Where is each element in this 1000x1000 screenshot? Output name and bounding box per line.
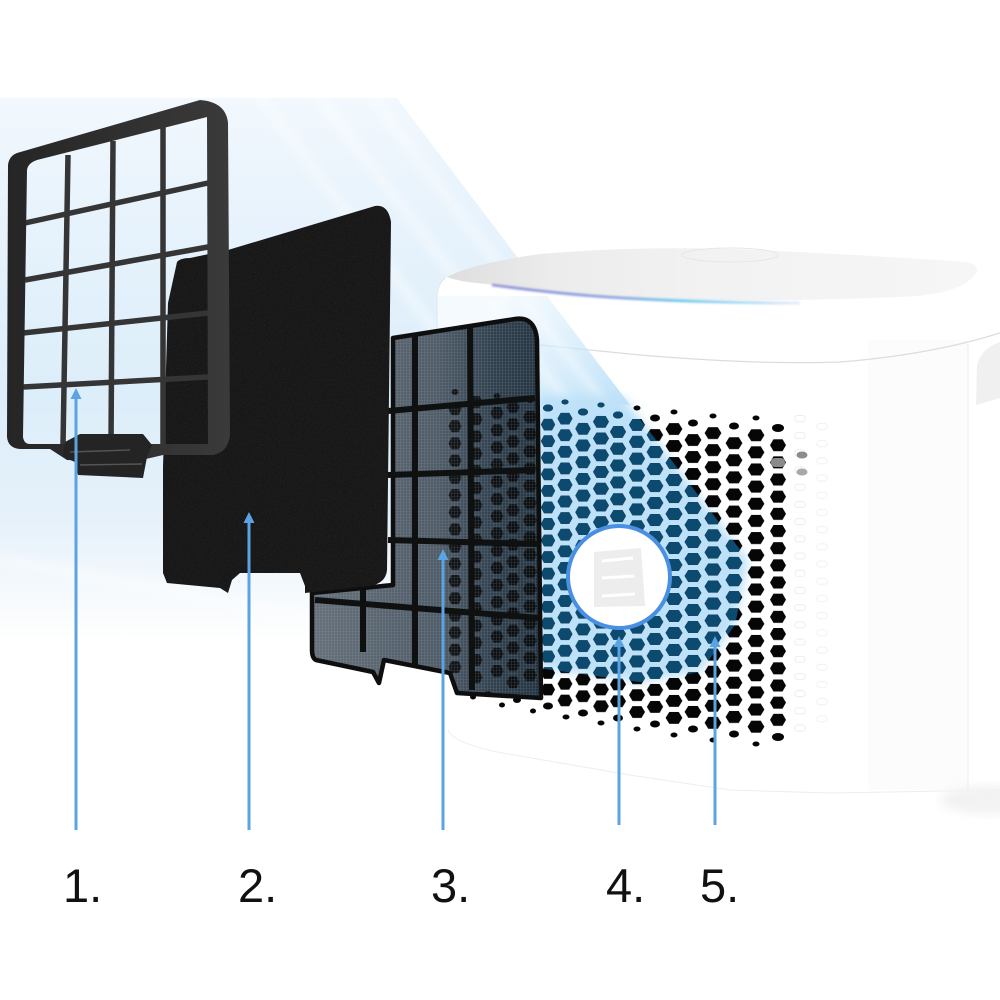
frame handle tab — [63, 434, 152, 478]
beam on body — [437, 296, 640, 450]
callout circle: filter cartridge icon — [568, 526, 670, 628]
LED glow line — [492, 285, 800, 303]
arrow 2 — [244, 512, 254, 830]
blue-tinted holes — [540, 400, 742, 682]
light ray stripes — [0, 98, 610, 620]
icon: filter cartridge — [594, 548, 645, 607]
arrow 1 — [70, 388, 82, 830]
mesh texture — [312, 319, 541, 698]
device body — [437, 262, 1000, 814]
filter 1: grid frame — [7, 100, 230, 478]
black holes — [448, 389, 787, 746]
background airflow glow — [0, 98, 623, 640]
top lid — [447, 248, 977, 303]
arrow 5 — [710, 636, 720, 825]
holes seen through mesh — [448, 389, 537, 693]
lid controls — [682, 248, 778, 262]
vent: hexagon holes — [448, 389, 787, 746]
beam tint over vent — [538, 395, 748, 682]
frame grid bars — [23, 127, 208, 445]
side handle — [976, 342, 1000, 405]
label 4: 4. — [606, 859, 645, 912]
side perforations — [771, 413, 831, 740]
outer frame — [7, 100, 230, 462]
arrow 3 — [438, 549, 448, 830]
filter 2: foam sheet — [163, 206, 391, 593]
label 2: 2. — [238, 859, 277, 912]
label 1: 1. — [63, 859, 102, 912]
mesh grid bars — [315, 326, 539, 690]
filter 3: mesh panel — [310, 316, 544, 700]
body seam — [540, 333, 1000, 363]
arrow 4 — [614, 636, 624, 825]
label 5: 5. — [700, 859, 739, 912]
label 3: 3. — [431, 859, 470, 912]
body shading — [868, 340, 968, 790]
